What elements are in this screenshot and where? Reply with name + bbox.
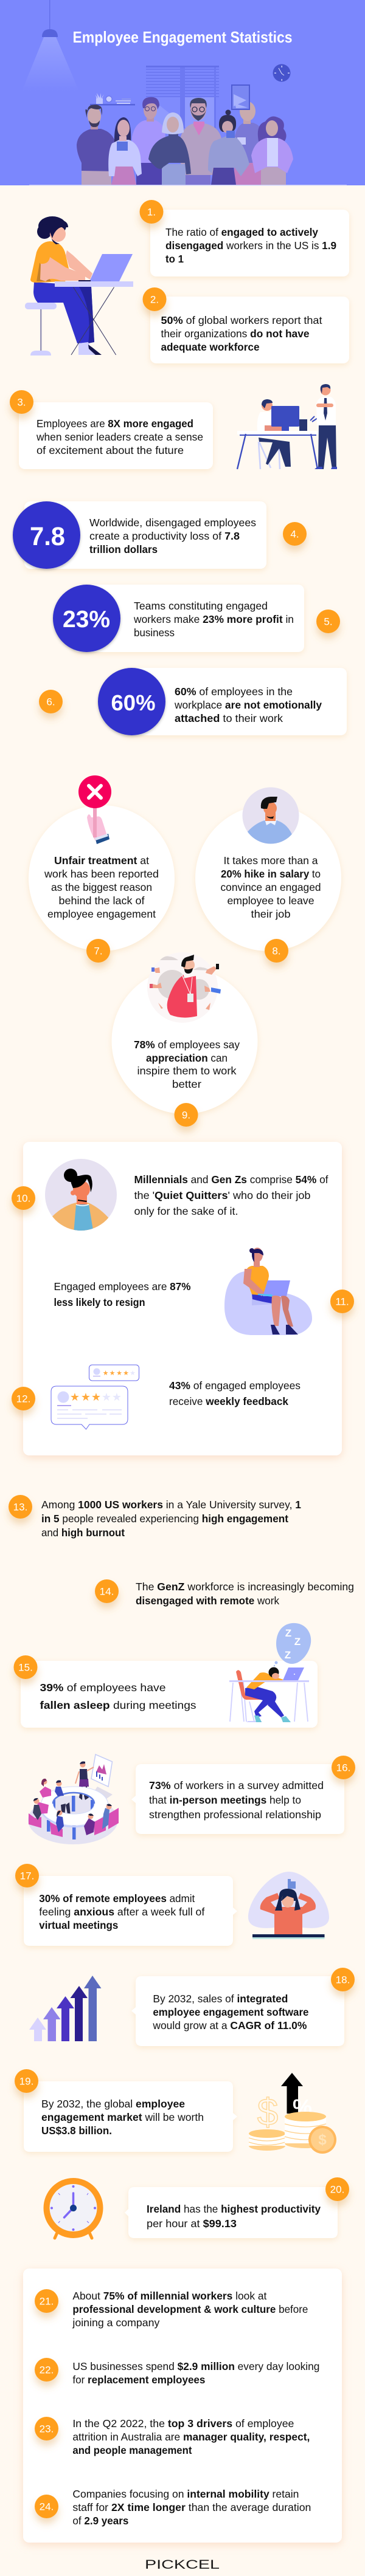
speech card [125, 2187, 338, 2238]
icon: man with thumbs up hands [147, 952, 221, 1023]
stat 11 text: less likely to resign [54, 1296, 145, 1308]
statistic text: would grow at a CAGR of 11.0% [152, 2019, 307, 2032]
number badge 12 [12, 1387, 35, 1410]
number badge 23: 23. [40, 2423, 54, 2434]
number badge [39, 690, 63, 713]
stat 23 text [72, 2417, 310, 2456]
panel card [23, 2269, 342, 2543]
team: person purple sweater [132, 97, 165, 185]
team: person back right holding frame [232, 85, 263, 185]
number badge: 8. [272, 946, 281, 957]
icon: sleeping worker at desk: Z [285, 1627, 291, 1639]
statistic text [147, 2203, 321, 2230]
stat 17 [15, 1864, 329, 1946]
stat 10 text: the 'Quiet Quitters' who do their job [134, 1189, 310, 1201]
team: woman with wavy hair [251, 117, 293, 185]
statistic text: 20% hike in salary to [221, 868, 321, 880]
stat 24 text: Companies focusing on internal mobility retain [72, 2488, 299, 2500]
statistic text: US$3.8 billion. [41, 2124, 112, 2137]
stat 24 text [72, 2488, 311, 2527]
statistic text: business [134, 627, 175, 639]
stat 4 [13, 501, 307, 569]
statistic text [41, 2098, 204, 2137]
statistic text: 30% of remote employees admit [39, 1892, 195, 1905]
statistic text: feeling anxious after a week full of [39, 1906, 204, 1918]
number badge: 20. [330, 2184, 344, 2195]
stat 11 text: Engaged employees are 87% [54, 1280, 191, 1293]
panel card [23, 1142, 342, 1455]
number badge 22 [35, 2358, 58, 2382]
statistic text: Worldwide, disengaged employees [89, 517, 256, 529]
number badge: 5. [324, 616, 333, 627]
statistic text: and high burnout [41, 1527, 125, 1539]
statistic text: adequate workforce [161, 341, 260, 353]
statistic text: employee engagement [47, 908, 156, 920]
number badge: 14. [100, 1586, 114, 1597]
stat 18 [131, 1968, 355, 2046]
number badge: 18. [336, 1974, 350, 1986]
statistic text [133, 600, 294, 639]
statistic text: Among 1000 US workers in a Yale University survey, 1 [41, 1499, 301, 1511]
icon: sleeping worker at desk: Z [294, 1636, 301, 1647]
statistic text [149, 1779, 324, 1821]
chart: five rising arrows [29, 1976, 101, 2041]
icon: star rating review bubbles: ★ [102, 1391, 111, 1403]
number badge: 1. [147, 207, 156, 218]
number badge 24: 24. [40, 2501, 54, 2512]
stat 6 [39, 668, 347, 735]
card [19, 402, 213, 469]
number badge [140, 200, 163, 224]
team: person bearded centre [181, 98, 221, 185]
statistic text: trillion dollars [89, 543, 158, 555]
stat 19 [15, 2069, 336, 2154]
number badge 23 [35, 2417, 58, 2440]
icon: star rating review bubbles: ★ [109, 1370, 116, 1377]
statistic text [89, 517, 256, 555]
statistic text [220, 854, 321, 920]
stat 8 [195, 788, 341, 963]
icon: star rating review bubbles: ★ [70, 1391, 80, 1403]
statistic text: better [172, 1078, 201, 1090]
speech card [131, 1976, 344, 2046]
logo: Pickcel: PICKCEL [145, 2558, 220, 2572]
icon: coins with black arrow: $ [257, 2092, 278, 2134]
number badge [10, 390, 33, 414]
statistic text: 73% of workers in a survey admitted [149, 1779, 324, 1791]
icon: sleeping worker at desk [229, 1623, 311, 1722]
statistic text [152, 1993, 309, 2032]
number badge: 4. [290, 529, 299, 540]
icon: star rating review bubbles: ★ [91, 1391, 101, 1403]
statistic text [40, 1681, 196, 1711]
number badge [325, 2177, 349, 2201]
number badge 11 [330, 1290, 354, 1313]
stat 5 [53, 585, 340, 652]
statistic text: Ireland has the highest productivity [147, 2203, 321, 2215]
number badge: 7. [94, 946, 103, 957]
lamp [22, 0, 79, 91]
panel: stats 10 to 12 [12, 1142, 354, 1455]
statistic text: per hour at $99.13 [147, 2217, 237, 2230]
number badge 10 [12, 1186, 35, 1210]
statistic text [136, 1581, 354, 1607]
icon: woman on beanbag with laptop [224, 1248, 312, 1335]
statistic text: their organizations do not have [161, 328, 310, 340]
card [24, 501, 266, 569]
number badge: 16. [336, 1762, 350, 1773]
big number circle: 23% [63, 606, 110, 633]
number badge 12: 12. [16, 1393, 30, 1405]
big number circle: 7.8 [30, 522, 65, 551]
stat 10 text [134, 1173, 328, 1217]
stat 22 text: for replacement employees [72, 2374, 206, 2386]
number badge 21: 21. [40, 2296, 54, 2307]
stat 11 text [54, 1280, 191, 1308]
stat 15 [13, 1623, 318, 1728]
statistic text: 50% of global workers report that [161, 314, 322, 326]
statistic text: convince an engaged [220, 881, 321, 893]
statistic text [36, 417, 203, 456]
stat 23 text: In the Q2 2022, the top 3 drivers of employee [72, 2417, 294, 2430]
statistic text: attached to their work [175, 712, 283, 724]
stat 1 [140, 200, 349, 276]
stat 13 [9, 1495, 301, 1539]
title: Employee Engagement Statistics [73, 28, 292, 46]
icon: star rating review bubbles: ★ [103, 1370, 109, 1377]
big number circle [98, 668, 165, 735]
panel: stats 21 to 24 [23, 2269, 342, 2543]
icon: man avatar [242, 788, 299, 846]
illustration: isometric meeting table [28, 1754, 119, 1844]
stat 16 [131, 1756, 355, 1834]
stat 23 text: and people management [72, 2444, 192, 2456]
card [150, 297, 349, 363]
icon: anxious woman [248, 1872, 329, 1939]
speech card [24, 2081, 237, 2152]
big number circle [53, 585, 120, 652]
team: woman grey hair [148, 112, 191, 185]
statistic text: 78% of employees say [134, 1039, 240, 1051]
stat 12 text [169, 1379, 301, 1407]
statistic text: workplace are not emotionally [174, 699, 322, 711]
circle card [29, 805, 175, 951]
statistic text: engagement market will be worth [41, 2111, 204, 2123]
statistic text: virtual meetings [39, 1919, 119, 1931]
statistic text [41, 1499, 301, 1539]
number badge [15, 2069, 38, 2093]
stat 9 [112, 952, 258, 1127]
statistic text: inspire them to work [137, 1065, 237, 1077]
circle card [112, 968, 258, 1114]
statistic text: employee to leave [228, 895, 314, 907]
stat 14 [95, 1579, 354, 1607]
statistic text: when senior leaders create a sense [36, 431, 203, 443]
header banner [0, 0, 365, 186]
number badge 10: 10. [16, 1192, 30, 1204]
icon: coins with black arrow [249, 2073, 336, 2154]
statistic text: disengaged workers in the US is 1.9 [165, 239, 336, 252]
number badge: 3. [17, 396, 26, 408]
number badge [15, 1864, 39, 1887]
card [122, 668, 347, 735]
stat 21 text [72, 2290, 308, 2329]
number badge: 17. [20, 1870, 34, 1881]
team: person far left [77, 105, 116, 185]
number badge: 19. [19, 2076, 33, 2087]
statistic text: disengaged with remote work [136, 1595, 279, 1607]
card [21, 1661, 318, 1728]
number badge 21 [35, 2289, 58, 2313]
stat 24 text: of 2.9 years [72, 2515, 129, 2527]
wall shelf [90, 93, 135, 106]
speech card [131, 1764, 344, 1834]
number badge: 6. [46, 696, 55, 707]
icon: orange alarm clock [44, 2178, 103, 2238]
statistic text: their job [251, 908, 291, 920]
statistic text: By 2032, the global employee [41, 2098, 185, 2110]
statistic text [134, 1039, 240, 1090]
statistic text [174, 685, 322, 724]
statistic text: to 1 [165, 253, 184, 265]
statistic text: fallen asleep during meetings [40, 1699, 196, 1711]
number badge [265, 939, 288, 963]
icon: star rating review bubbles: ★ [81, 1391, 91, 1403]
statistic text: employee engagement software [153, 2006, 309, 2018]
icon: star rating review bubbles: ★ [130, 1370, 136, 1377]
statistic text: 39% of employees have [40, 1681, 165, 1694]
wall clock [273, 64, 291, 81]
statistic text [165, 226, 336, 265]
icon: star rating review bubbles: ★ [116, 1370, 122, 1377]
number badge [9, 1495, 32, 1519]
statistic text: in 5 people revealed experiencing high engagement [41, 1513, 288, 1525]
statistic text: 60% of employees in the [175, 685, 293, 698]
number badge [331, 1968, 355, 1991]
statistic text: Unfair treatment at [54, 854, 149, 867]
icon: coins with black arrow: % [293, 2095, 312, 2120]
statistic text: of excitement about the future [36, 444, 184, 456]
stat 21 text: About 75% of millennial workers look at [72, 2290, 267, 2302]
number badge: 9. [182, 1110, 190, 1121]
illustration: woman working on laptop [25, 216, 133, 355]
icon: star rating review bubbles: ★ [112, 1391, 122, 1403]
statistic text: that in-person meetings help to [149, 1794, 301, 1806]
statistic text: By 2032, sales of integrated [153, 1993, 288, 2005]
number badge [86, 939, 110, 963]
statistic text [44, 854, 159, 920]
number badge 22: 22. [40, 2364, 54, 2376]
icon: hand holding red cross sign [78, 775, 111, 844]
stat 20 [125, 2177, 349, 2238]
card [150, 210, 349, 276]
big number circle: 60% [111, 690, 156, 715]
icon: woman avatar [45, 1159, 117, 1234]
stat 7 [29, 775, 175, 963]
team: woman with pink skirt [108, 117, 142, 185]
statistic text: behind the lack of [58, 895, 145, 907]
stat 21 text: professional development & work culture before [72, 2303, 308, 2315]
icon: coins with black arrow: $ [318, 2132, 327, 2148]
statistic text: Teams constituting engaged [134, 600, 268, 612]
statistic text: as the biggest reason [51, 881, 152, 893]
stat 12 text: receive weekly feedback [169, 1395, 288, 1407]
speech card [24, 1876, 237, 1946]
statistic text [39, 1892, 204, 1931]
statistic text: It takes more than a [224, 854, 318, 867]
stat 21 text: joining a company [72, 2317, 160, 2329]
window with blinds [146, 66, 219, 128]
statistic text [161, 314, 322, 353]
number badge: 15. [18, 1661, 33, 1674]
icon: star rating review bubbles: ★ [123, 1370, 129, 1377]
number badge [316, 610, 340, 633]
number badge [142, 287, 167, 311]
stat 2 [142, 287, 349, 363]
circle card [195, 805, 341, 951]
number badge: 2. [150, 294, 159, 305]
stat 22 text: US businesses spend $2.9 million every day looking [72, 2360, 319, 2372]
illustration: managers at desk [237, 384, 337, 469]
number badge [283, 522, 307, 546]
statistic text: The GenZ workforce is increasingly becoming [136, 1581, 354, 1593]
statistic text: Employees are 8X more engaged [36, 417, 193, 430]
stat 22 text [72, 2360, 319, 2386]
big number circle [13, 501, 80, 569]
number badge: 13. [13, 1501, 27, 1513]
card [73, 585, 304, 652]
stat 23 text: attrition in Australia are manager quality, respect, [72, 2431, 310, 2443]
statistic text: The ratio of engaged to actively [165, 226, 318, 238]
statistic text: workers make 23% more profit in [133, 613, 294, 625]
number badge [13, 1655, 38, 1679]
number badge [174, 1103, 198, 1127]
stat 12 text: 43% of engaged employees [169, 1379, 301, 1392]
number badge 11: 11. [335, 1296, 349, 1308]
stat 10 text: Millennials and Gen Zs comprise 54% of [134, 1173, 328, 1186]
number badge 24 [35, 2495, 58, 2518]
statistic text: create a productivity loss of 7.8 [89, 530, 240, 542]
number badge [95, 1579, 119, 1603]
statistic text: strengthen professional relationship [149, 1808, 321, 1821]
stat 10 text: only for the sake of it. [134, 1205, 238, 1217]
statistic text: work has been reported [44, 868, 159, 880]
stat 24 text: staff for 2X time longer than the average duration [72, 2501, 311, 2513]
icon: star rating review bubbles [51, 1365, 139, 1429]
icon: sleeping worker at desk: Z [285, 1649, 291, 1661]
stat 3 [10, 390, 213, 469]
statistic text: appreciation can [146, 1052, 228, 1064]
team: woman with bun [208, 109, 249, 185]
number badge [332, 1756, 355, 1779]
